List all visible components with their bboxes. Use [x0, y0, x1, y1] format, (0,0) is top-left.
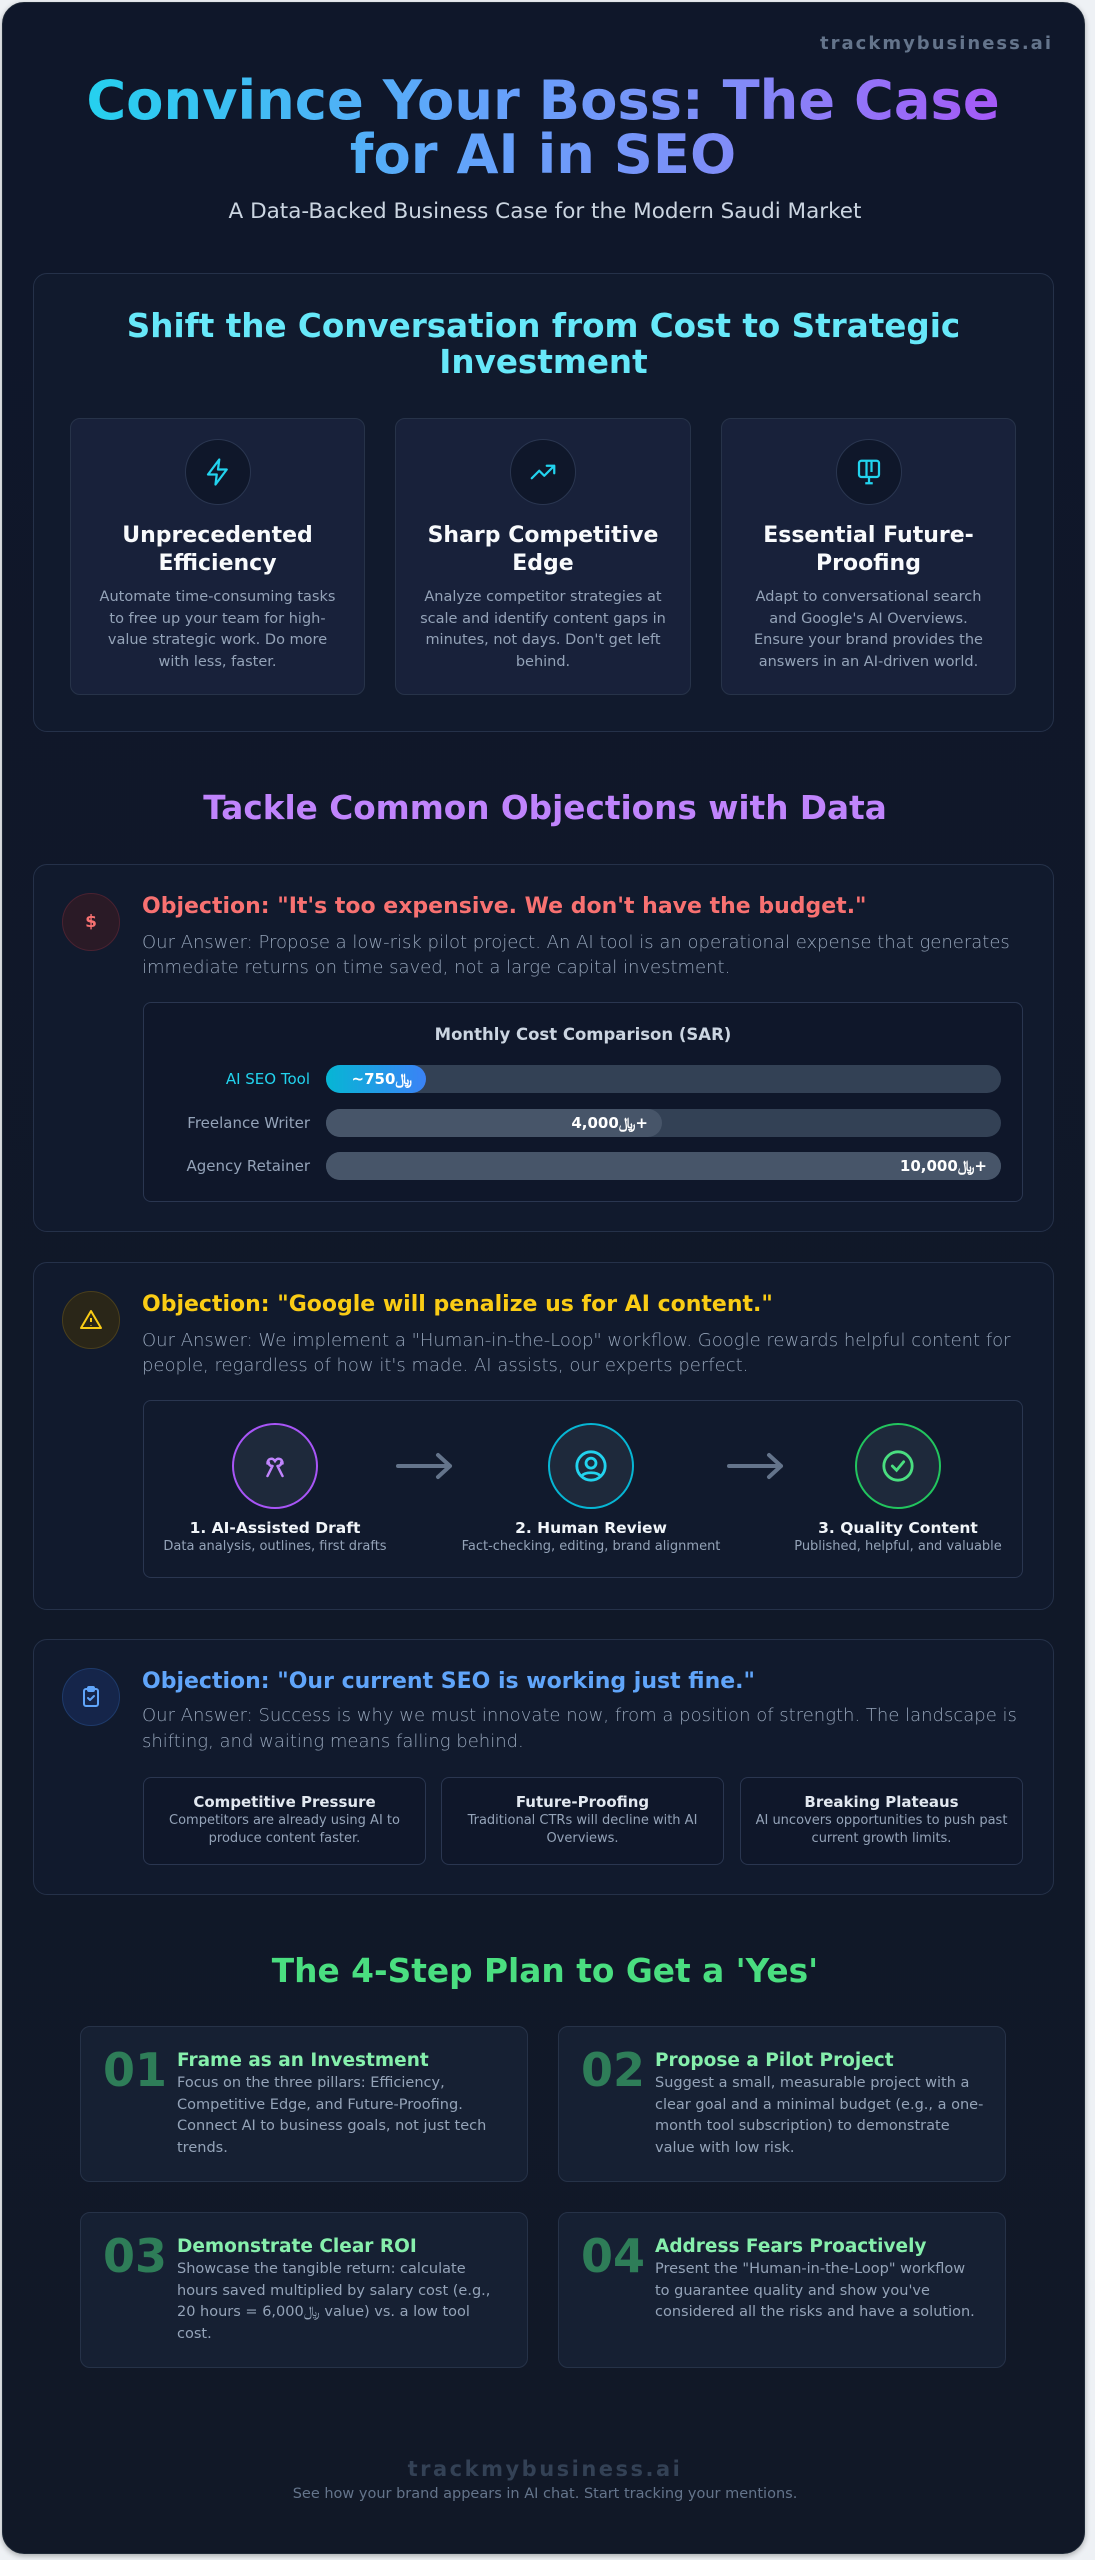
- card title: Efficiency: [158, 551, 277, 576]
- card: efficiency: [70, 418, 365, 695]
- panel heading: [127, 307, 960, 381]
- box: competitive pressure: Competitive Pressure: [193, 1793, 376, 1811]
- card text: Ensure your brand provides the: [754, 632, 983, 648]
- step 04: Present the "Human-in-the-Loop" workflow: [655, 2261, 965, 2277]
- step 01: 01: [103, 2043, 167, 2097]
- workflow diagram: 3. Quality Content: [818, 1519, 978, 1537]
- row: freelance: 4,000﷼+: [571, 1114, 648, 1132]
- box: breaking plateaus: current growth limits.: [812, 1831, 951, 1846]
- card: competitive edge: [395, 418, 691, 695]
- card text: and Google's AI Overviews.: [769, 611, 968, 627]
- section heading: plan: The 4-Step Plan to Get a 'Yes': [272, 1952, 818, 1990]
- icon: monitor: [836, 439, 902, 505]
- box: competitive pressure: produce content faster.: [209, 1831, 360, 1846]
- icon: dollar: [62, 893, 120, 951]
- workflow diagram: 1. AI-Assisted Draft: [190, 1519, 360, 1537]
- card text: behind.: [516, 654, 570, 670]
- arrow 1: [396, 1452, 452, 1480]
- step 02: value with low risk.: [655, 2140, 795, 2156]
- step 04: [558, 2212, 1006, 2368]
- answer 1: Our Answer: Propose a low-risk pilot project. An AI tool is an operational expense that generates immediate returns on time saved, not a large capital investment.: [142, 932, 1010, 978]
- row: agency: 10,000﷼+: [900, 1157, 987, 1175]
- brand top: trackmybusiness.ai: [820, 33, 1053, 54]
- icon: clipboard: [62, 1668, 120, 1726]
- box: competitive pressure: Competitors are already using AI to: [169, 1813, 400, 1828]
- card text: with less, faster.: [158, 654, 277, 670]
- step 3: [855, 1423, 941, 1509]
- box: breaking plateaus: Breaking Plateaus: [804, 1793, 959, 1811]
- chart title: Monthly Cost Comparison (SAR): [435, 1025, 731, 1044]
- workflow diagram: [143, 1400, 1023, 1578]
- card title: [763, 523, 974, 576]
- footer brand: trackmybusiness.ai: [408, 2457, 682, 2481]
- icon: dollar: $: [85, 912, 97, 932]
- objection title 3: Objection: "Our current SEO is working just fine.": [142, 1669, 755, 1694]
- panel: objection working fine: [33, 1639, 1054, 1895]
- box: breaking plateaus: [740, 1777, 1023, 1865]
- step 03: 20 hours = 6,000﷼ value) vs. a low tool: [177, 2304, 470, 2320]
- box: future-proofing: [441, 1777, 724, 1865]
- step 02: Propose a Pilot Project: [655, 2050, 894, 2071]
- icon: warning: [62, 1291, 120, 1349]
- card text: [754, 589, 983, 670]
- row: freelance: Freelance Writer: [187, 1114, 310, 1132]
- card text: Automate time-consuming tasks: [100, 589, 335, 605]
- panel heading: Shift the Conversation from Cost to Strategic: [127, 307, 960, 345]
- workflow diagram: Data analysis, outlines, first drafts: [163, 1539, 387, 1554]
- step 02: clear goal and a minimal budget (e.g., a one-: [655, 2097, 983, 2113]
- step 02: [558, 2026, 1006, 2182]
- objection title 1: Objection: "It's too expensive. We don't have the budget.": [142, 894, 867, 919]
- card text: to free up your team for high-: [109, 611, 326, 627]
- box: competitive pressure: [143, 1777, 426, 1865]
- step 04: Address Fears Proactively: [655, 2236, 926, 2257]
- card text: answers in an AI-driven world.: [759, 654, 978, 670]
- box: future-proofing: Overviews.: [546, 1831, 619, 1846]
- step 02: 02: [581, 2043, 645, 2097]
- subtitle: A Data-Backed Business Case for the Modern Saudi Market: [229, 199, 861, 224]
- panel: objection expensive: [33, 864, 1054, 1232]
- card text: [420, 589, 666, 670]
- step 01: Connect AI to business goals, not just tech: [177, 2118, 486, 2134]
- card text: [100, 589, 335, 670]
- workflow diagram: 2. Human Review: [515, 1519, 667, 1537]
- step 03: hours saved multiplied by salary cost (e.g.,: [177, 2283, 490, 2299]
- step 02: Suggest a small, measurable project with a: [655, 2075, 969, 2091]
- step 01: Focus on the three pillars: Efficiency,: [177, 2075, 445, 2091]
- title: Convince Your Boss: The Case: [86, 69, 1000, 132]
- card text: minutes, not days. Don't get left: [425, 632, 661, 648]
- step 04: 04: [581, 2229, 645, 2283]
- row: agency: [186, 1152, 1001, 1180]
- arrow 2: [727, 1452, 784, 1480]
- card: future-proofing: [721, 418, 1016, 695]
- card title: Unprecedented: [122, 523, 313, 548]
- title: for AI in SEO: [350, 123, 736, 186]
- footer tagline: See how your brand appears in AI chat. Start tracking your mentions.: [293, 2486, 797, 2502]
- row: AI tool: AI SEO Tool: [226, 1070, 310, 1088]
- card title: Proofing: [816, 551, 921, 576]
- box: future-proofing: Future-Proofing: [516, 1793, 649, 1811]
- objection title 2: Objection: "Google will penalize us for AI content.": [142, 1292, 773, 1317]
- step 01: Competitive Edge, and Future-Proofing.: [177, 2097, 463, 2113]
- panel heading: Investment: [439, 343, 648, 381]
- step 03: Showcase the tangible return: calculate: [177, 2261, 466, 2277]
- step 04: to guarantee quality and show you've: [655, 2283, 930, 2299]
- step 01: Frame as an Investment: [177, 2050, 429, 2071]
- icon: trend: [510, 439, 576, 505]
- step 04: considered all the risks and have a solution.: [655, 2304, 975, 2320]
- panel: strategic investment: [33, 273, 1054, 732]
- card text: Adapt to conversational search: [756, 589, 981, 605]
- row: freelance: [187, 1109, 1001, 1137]
- step 01: [80, 2026, 528, 2182]
- box: future-proofing: Traditional CTRs will decline with AI: [468, 1813, 697, 1828]
- card title: [122, 523, 313, 576]
- card title: Sharp Competitive: [428, 523, 658, 548]
- card title: Essential Future-: [763, 523, 974, 548]
- icon: lightning: [185, 439, 251, 505]
- step 01: trends.: [177, 2140, 228, 2156]
- step 1: [232, 1423, 318, 1509]
- bar chart: monthly cost: [143, 1002, 1023, 1202]
- step 03: [80, 2212, 528, 2368]
- workflow diagram: Fact-checking, editing, brand alignment: [462, 1539, 720, 1554]
- step 02: month tool subscription) to demonstrate: [655, 2118, 950, 2134]
- workflow diagram: Published, helpful, and valuable: [794, 1539, 1002, 1554]
- box: breaking plateaus: AI uncovers opportunities to push past: [756, 1813, 1007, 1828]
- panel: objection google: [33, 1262, 1054, 1610]
- answer 3: Our Answer: Success is why we must innovate now, from a position of strength. The landscape is shifting, and waiting means falling behind.: [142, 1705, 1017, 1752]
- card title: Edge: [512, 551, 574, 576]
- step 03: Demonstrate Clear ROI: [177, 2236, 417, 2257]
- card title: [428, 523, 658, 576]
- row: AI tool: [226, 1065, 1001, 1093]
- card text: scale and identify content gaps in: [420, 611, 666, 627]
- answer 2: Our Answer: We implement a "Human-in-the-Loop" workflow. Google rewards helpful content for people, regardless of how it's made. AI assists, our experts perfect.: [142, 1330, 1011, 1376]
- step 03: cost.: [177, 2326, 212, 2342]
- title: [67, 74, 1019, 182]
- section heading: objections: Tackle Common Objections with Data: [203, 789, 887, 827]
- card text: Analyze competitor strategies at: [424, 589, 662, 605]
- row: AI tool: ~750﷼: [352, 1070, 412, 1088]
- card text: value strategic work. Do more: [108, 632, 327, 648]
- step 03: 03: [103, 2229, 167, 2283]
- step 2: [548, 1423, 634, 1509]
- row: agency: Agency Retainer: [186, 1157, 310, 1175]
